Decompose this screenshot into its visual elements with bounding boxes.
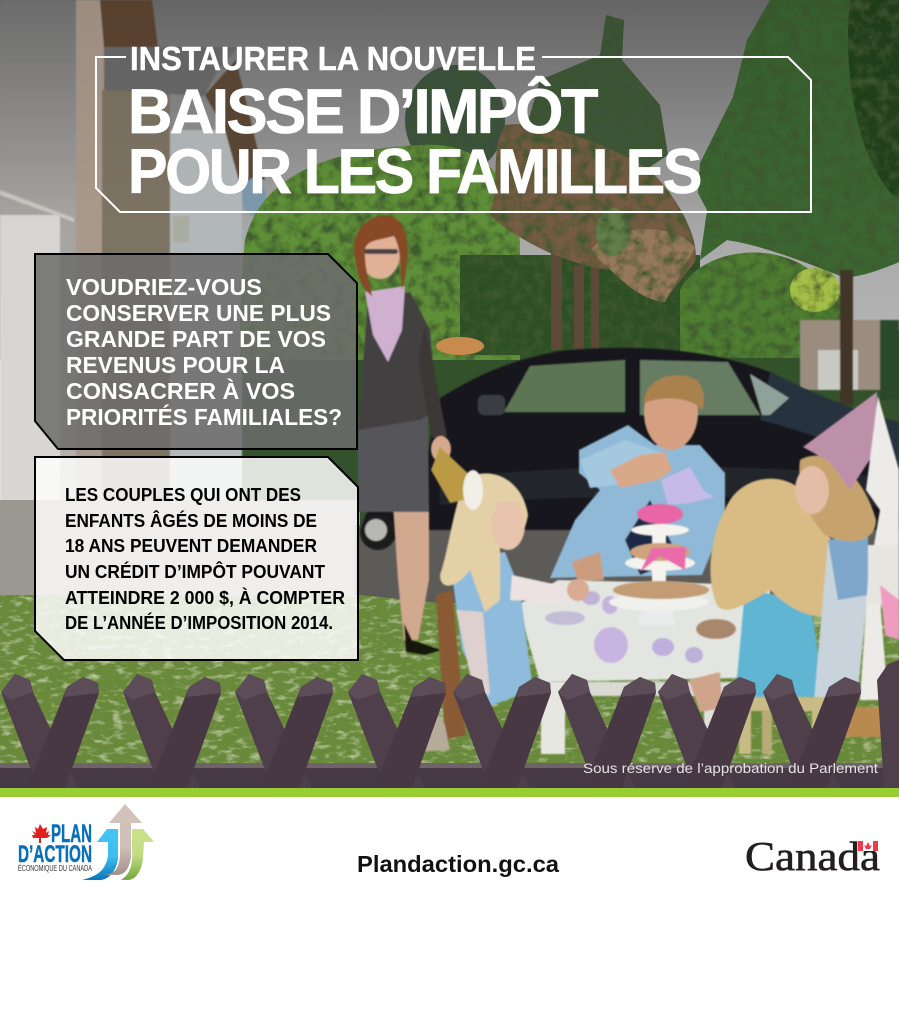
logo wordmark: D’ACTION: [18, 841, 92, 868]
explanation text: ENFANTS ÂGÉS DE MOINS DE: [65, 510, 317, 531]
panel: question: [35, 254, 357, 449]
icon: green arrow: [121, 829, 154, 880]
ornamental tree with brown foliage: [490, 15, 696, 350]
backdrop foliage behind car: [235, 330, 899, 540]
question text: REVENUS POUR LA: [66, 352, 285, 378]
icon: taupe arrow: [103, 804, 142, 875]
girl with pink party hat far right: [795, 392, 899, 700]
website address: Plandaction.gc.ca: [357, 851, 559, 877]
logo wordmark: [18, 820, 92, 868]
tree trunks: [551, 250, 599, 350]
question text: CONSERVER UNE PLUS: [66, 300, 331, 326]
panel: tax credit explanation: [35, 457, 358, 660]
distant houses right: [800, 270, 899, 405]
hedge and background trees: [240, 65, 848, 360]
title: [128, 40, 700, 207]
logo tagline: ÉCONOMIQUE DU CANADA: [18, 864, 92, 873]
house wall, garage, brick and roof: [0, 0, 266, 530]
woman in grey suit: [354, 215, 451, 655]
black car: [360, 348, 899, 550]
question text: CONSACRER À VOS: [66, 377, 295, 404]
lawn: [0, 595, 899, 790]
fence rail: [0, 763, 899, 788]
little girl with crown on the left: [431, 447, 589, 740]
icon: maple leaf: [32, 824, 51, 843]
question text: PRIORITÉS FAMILIALES?: [66, 403, 342, 430]
tiered cake stand: [609, 504, 709, 625]
question text: GRANDE PART DE VOS: [66, 326, 326, 352]
explanation text: 18 ANS PEUVENT DEMANDER: [65, 535, 317, 556]
title line 1: INSTAURER LA NOUVELLE: [130, 40, 536, 77]
title line 2: BAISSE D’IMPÔT: [128, 76, 598, 147]
icon: blue arrow: [82, 829, 118, 880]
foreground tree top right: [698, 0, 899, 277]
explanation text: ATTEINDRE 2 000 $, À COMPTER: [65, 587, 345, 608]
fence posts: [1, 660, 899, 788]
logo: Canada wordmark: Canada: [745, 833, 880, 879]
question text: [66, 274, 342, 430]
man with teapot, denim shirt: [550, 375, 725, 582]
road: [355, 525, 899, 607]
green band: [0, 788, 899, 797]
explanation text: UN CRÉDIT D’IMPÔT POUVANT: [65, 561, 326, 582]
icon: Canadian flag: [858, 841, 878, 851]
driveway: [0, 500, 360, 605]
dark tint at top of photo: [0, 0, 899, 230]
logo wordmark: PLAN: [51, 820, 92, 848]
photo: family tea party in front yard: [0, 0, 899, 790]
title frame: [96, 57, 811, 212]
question text: VOUDRIEZ-VOUS: [66, 274, 262, 300]
title line 3: POUR LES FAMILLES: [128, 137, 700, 207]
autumn shrub by car: [436, 337, 484, 355]
sky: [0, 0, 899, 360]
explanation text: LES COUPLES QUI ONT DES: [65, 484, 301, 505]
explanation text: [65, 484, 345, 633]
wooden chairs and stuffed toy: [410, 697, 899, 754]
logo: Plan d'action économique du Canada: [18, 804, 154, 880]
blonde girl right foreground: [689, 479, 842, 712]
disclaimer caption: Sous réserve de l’approbation du Parlement: [583, 760, 878, 776]
explanation text: DE L’ANNÉE D’IMPOSITION 2014.: [65, 612, 333, 633]
tea table with teacups: [518, 580, 770, 756]
